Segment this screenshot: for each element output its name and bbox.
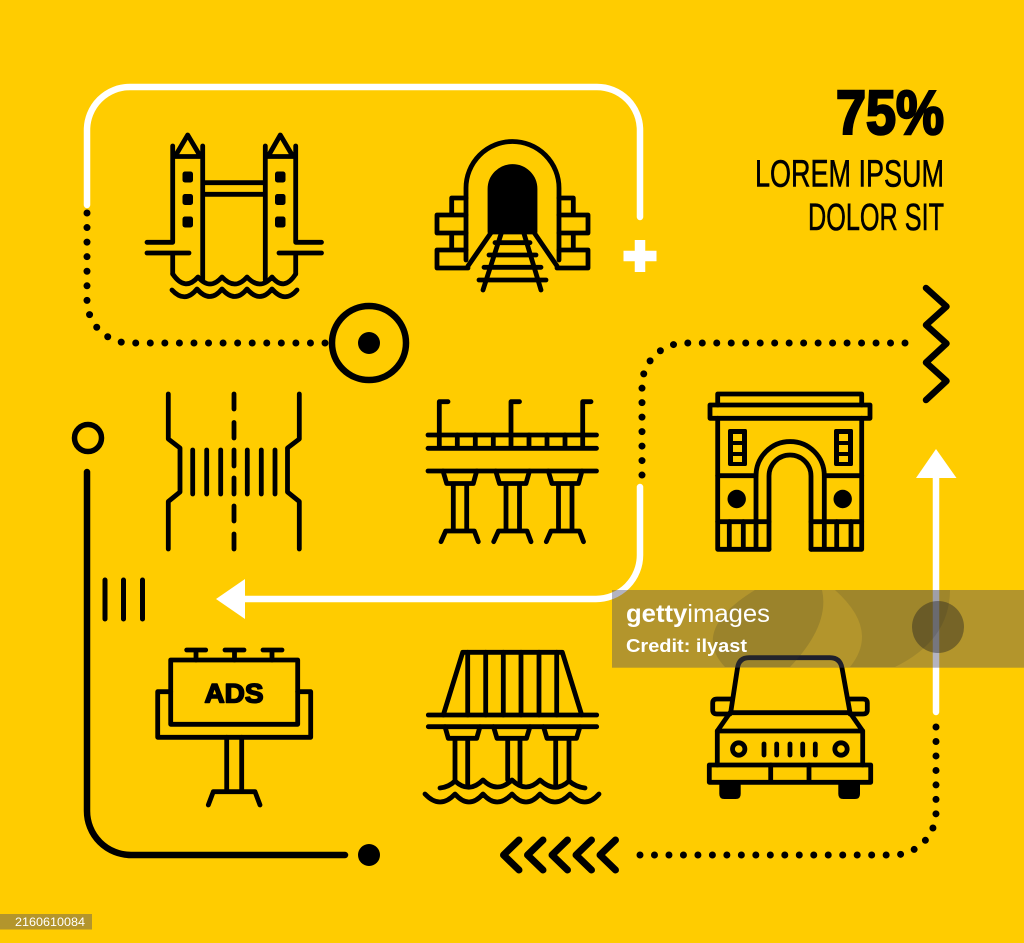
image id tag	[0, 914, 92, 930]
image id tag: 2160610084	[15, 915, 85, 929]
icon: railway tunnel	[437, 142, 588, 290]
dotted path left	[87, 213, 328, 343]
text: ADS: ADS	[204, 678, 264, 708]
arrow: white up	[916, 449, 956, 712]
icon: target circle	[332, 306, 406, 380]
text: getty images: gettyimages	[626, 600, 770, 628]
text: credit: Credit: ilyast	[626, 636, 747, 656]
watermark banner	[612, 590, 1024, 668]
icon: plus	[624, 240, 656, 272]
dotted path right bottom	[637, 727, 936, 855]
icon: viaduct	[428, 402, 596, 542]
three bars	[105, 580, 142, 619]
arrow: white left	[216, 487, 640, 619]
white path top	[87, 87, 640, 217]
chevrons	[504, 840, 616, 870]
icon: car	[709, 658, 871, 799]
icon: road crossing	[168, 394, 299, 549]
icon: billboard	[158, 650, 311, 805]
icon: triumphal arch	[710, 394, 870, 549]
text: lorem ipsum: LOREM IPSUM	[755, 154, 944, 196]
black path left	[74, 424, 380, 866]
text: dolor sit: DOLOR SIT	[808, 197, 944, 239]
icon: zigzag	[926, 288, 946, 400]
dotted path right top	[642, 343, 905, 476]
heading: 75%: 75%	[836, 79, 944, 148]
icon: river bridge	[425, 652, 599, 802]
icon: tower bridge	[147, 135, 322, 297]
